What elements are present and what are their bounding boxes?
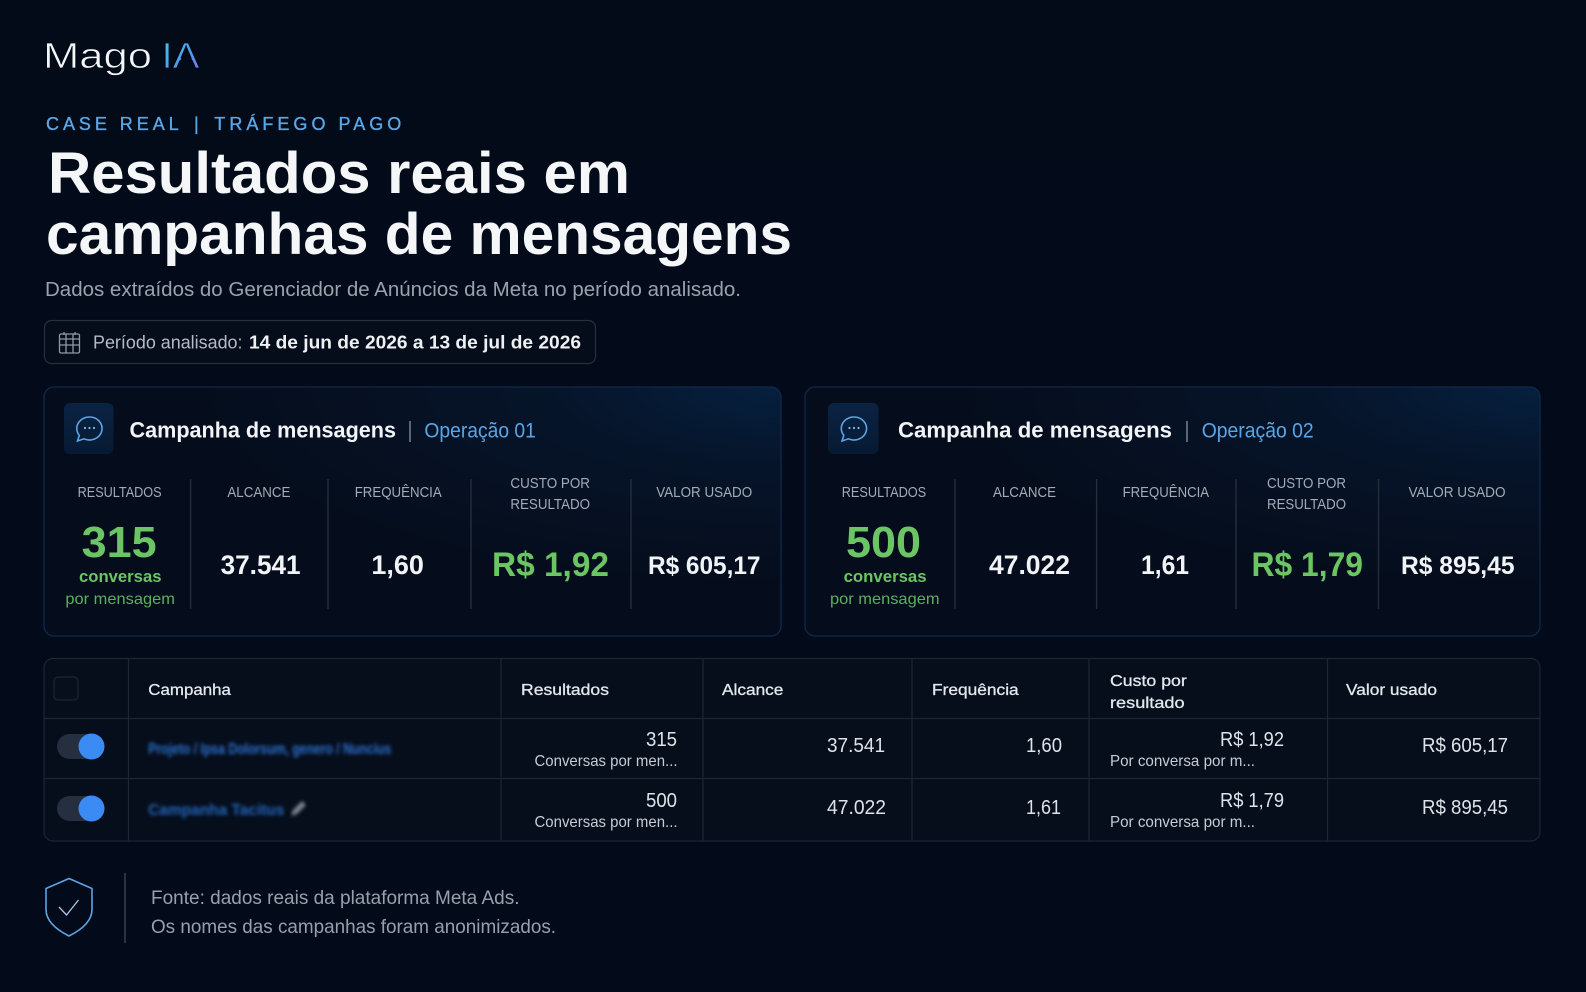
metric: alcance: ALCANCE (993, 484, 1056, 501)
table header: resultado (1110, 695, 1185, 712)
logo: Mago IA: Mago (43, 35, 152, 76)
eyebrow: CASE REAL (46, 114, 179, 134)
anonymized campaign name: Campanha Tacitus (148, 802, 284, 819)
metric: frequência: 1,61 (1141, 550, 1189, 580)
metric: alcance: 37.541 (221, 550, 301, 580)
metric: valor usado (1401, 484, 1515, 580)
toggle on (57, 734, 104, 760)
metric: custo por resultado (1252, 475, 1363, 584)
metric: resultados (830, 484, 940, 608)
heading (130, 418, 536, 442)
table header: Valor usado (1346, 682, 1437, 699)
row 2: 1,61 (1026, 797, 1061, 819)
row 1: 315 (646, 729, 677, 751)
metric: custo por resultado: RESULTADO (510, 496, 590, 513)
source note: Os nomes das campanhas foram anonimizados. (151, 916, 556, 938)
table header: Resultados (521, 682, 609, 699)
title: campanhas de mensagens (46, 202, 792, 267)
period badge (44, 320, 596, 364)
metric: valor usado: VALOR USADO (656, 484, 752, 501)
subtitle: Dados extraídos do Gerenciador de Anúncios da Meta no período analisado. (45, 278, 741, 301)
row 2: R$ 1,79 (1220, 790, 1284, 812)
table header (148, 673, 1437, 712)
metric: custo por resultado: CUSTO POR (510, 475, 590, 492)
table header: Campanha (148, 682, 231, 699)
icon: chat bubble (828, 403, 878, 454)
heading: Operação 01 (424, 420, 536, 442)
panel: campaign operation 01 (44, 387, 781, 636)
footer divider (124, 873, 126, 943)
row 1: R$ 1,92 (1220, 729, 1284, 751)
checkbox (54, 677, 78, 700)
logo: Mago IA: IA (162, 35, 200, 76)
eyebrow: | (194, 114, 199, 134)
row 2: Conversas por men... (534, 814, 678, 831)
metric: resultados: conversas (79, 567, 162, 586)
metric: frequência: FREQUÊNCIA (1123, 484, 1209, 501)
source note (151, 887, 556, 938)
eyebrow: TRÁFEGO PAGO (214, 114, 401, 134)
row 1: Por conversa por m... (1110, 753, 1255, 770)
metric: resultados: RESULTADOS (842, 484, 926, 501)
metric: custo por resultado: RESULTADO (1267, 496, 1346, 513)
metric: custo por resultado: R$ 1,92 (492, 546, 609, 584)
metric: custo por resultado (492, 475, 609, 584)
heading (898, 418, 1314, 442)
row 1: Conversas por men... (534, 753, 678, 770)
row 1: R$ 605,17 (1422, 735, 1508, 757)
data table (44, 658, 1540, 841)
metric: alcance: 47.022 (989, 550, 1070, 580)
metric: frequência (1123, 484, 1209, 580)
heading: Operação 02 (1202, 420, 1314, 442)
row 2 (57, 790, 1508, 831)
metric: resultados: por mensagem (65, 591, 175, 608)
metric: frequência: 1,60 (371, 550, 424, 580)
icon: blurred pencil (291, 801, 306, 816)
heading: Campanha de mensagens (130, 418, 396, 442)
metric: valor usado: R$ 605,17 (648, 552, 760, 580)
metric: alcance: ALCANCE (227, 484, 290, 501)
metric: resultados: RESULTADOS (78, 484, 162, 501)
metric: custo por resultado: CUSTO POR (1267, 475, 1346, 492)
metric: alcance (221, 484, 301, 580)
metric: valor usado: VALOR USADO (1408, 484, 1506, 501)
row 2: Por conversa por m... (1110, 814, 1255, 831)
icon: chat bubble (64, 403, 114, 454)
row 1: 37.541 (827, 735, 885, 757)
table header: Frequência (932, 682, 1019, 699)
row 2: R$ 895,45 (1422, 797, 1508, 819)
metric: resultados: 315 (82, 518, 157, 567)
metric: frequência (355, 484, 442, 580)
row 1: 1,60 (1026, 735, 1062, 757)
period badge: 14 de jun de 2026 a 13 de jul de 2026 (249, 332, 581, 352)
metric: frequência: FREQUÊNCIA (355, 484, 442, 501)
source note: Fonte: dados reais da plataforma Meta Ads. (151, 887, 520, 909)
table header: Alcance (722, 682, 784, 699)
row 1 (57, 729, 1508, 770)
panel: campaign operation 02 (805, 387, 1540, 636)
icon: calendar (60, 332, 80, 353)
metric: resultados: por mensagem (830, 591, 940, 608)
row 2: 47.022 (827, 797, 886, 819)
heading: Campanha de mensagens (898, 418, 1172, 442)
eyebrow (46, 114, 401, 134)
table header: Custo por (1110, 673, 1188, 690)
icon: shield check (46, 878, 92, 936)
metric: resultados: conversas (844, 567, 927, 586)
metric: valor usado: R$ 895,45 (1401, 552, 1515, 580)
title: Resultados reais em (48, 141, 630, 206)
metric: alcance (989, 484, 1070, 580)
metric: resultados (65, 484, 175, 608)
row 2: 500 (646, 790, 677, 812)
metric: resultados: 500 (846, 518, 921, 567)
toggle on (57, 796, 104, 822)
metric: custo por resultado: R$ 1,79 (1252, 546, 1363, 584)
metric: valor usado (648, 484, 760, 580)
logo: Mago IA (43, 35, 200, 76)
anonymized campaign name: Projeto / Ipsa Dolorsum, genero / Nuncius (148, 741, 391, 758)
title (46, 141, 792, 267)
period badge: Período analisado: (93, 332, 242, 352)
